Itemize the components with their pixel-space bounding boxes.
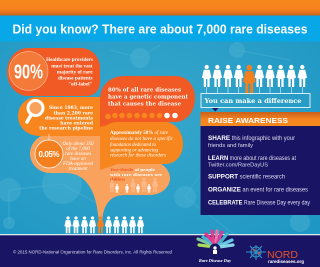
footer xyxy=(0,234,320,267)
text: FDA approved: treatment xyxy=(69,167,88,172)
logo: NORD xyxy=(246,245,304,264)
text: research pipeline: Since 1983, more xyxy=(49,105,93,111)
icon: magnifying glass xyxy=(27,100,43,122)
panel: awareness list: friends and family xyxy=(208,143,253,149)
logo: rare disease day xyxy=(198,231,233,263)
text: foundation: research for these disorders xyxy=(110,154,166,158)
text: two-thirds: children xyxy=(110,176,125,182)
panel: awareness list: LEARN more about rare diseases at xyxy=(208,155,296,162)
panel: red 90 percent bubble xyxy=(7,48,100,96)
text: FDA approved: have an xyxy=(70,157,86,162)
panel: peach left bubble with tail xyxy=(30,134,170,221)
panel: awareness list: CELEBRATE Rare Disease Day every day xyxy=(208,200,310,206)
text: genetic component: that causes the disease xyxy=(108,102,182,108)
text: foundation: Approximately 50% of rare xyxy=(110,131,169,136)
panel: red 80 percent bubble xyxy=(100,76,195,127)
text: foundation: supporting or advancing xyxy=(110,148,158,154)
panel: awareness list: SHARE this infographic with your xyxy=(208,135,295,142)
text: foundation: diseases do not have a specific xyxy=(110,137,174,142)
heading: raise awareness: RAISE AWARENESS xyxy=(208,116,288,125)
text: FDA approved: rare diseases xyxy=(65,152,91,157)
title banner xyxy=(0,16,320,42)
logo: NORD: rarediseases.org xyxy=(268,259,304,264)
text: FDA approved: FDA-approved xyxy=(62,162,94,167)
text: research pipeline: the research pipeline xyxy=(39,126,93,132)
callout: you can make a difference xyxy=(201,87,310,112)
text: two-thirds: with rare diseases are xyxy=(109,172,162,177)
text: two-thirds xyxy=(109,167,162,182)
text: FDA approved: of the 7,000 xyxy=(66,147,90,152)
text: off-label: majority of rare xyxy=(57,70,93,76)
text: genetic component xyxy=(108,88,188,108)
stat: 90 percent: 90% xyxy=(14,62,43,84)
stat: 90 percent xyxy=(9,52,48,90)
text: two-thirds: Two-thirds of people xyxy=(110,167,155,172)
panel: awareness list: SUPPORT scientific research xyxy=(208,174,285,180)
text: genetic component: have a genetic component xyxy=(108,94,188,100)
text: foundation: foundation dedicated to xyxy=(110,143,156,148)
dots: 80 percent xyxy=(105,113,178,119)
stat: 0.05 percent: 0.05% xyxy=(38,150,60,159)
copyright: © 2015 NORD-National Organization for Rare Disorders, Inc. All Rights Reserved xyxy=(13,250,173,254)
text: genetic component: 80% of all rare diseases xyxy=(108,88,181,94)
panel: awareness list: ORGANIZE an event for rare diseases xyxy=(208,186,308,194)
panel: awareness list: Twitter.com/RareDayUS xyxy=(208,162,268,168)
text: off-label: Healthcare providers xyxy=(46,57,93,63)
panel: orange research pipeline bubble xyxy=(18,97,112,136)
people row: bottom xyxy=(64,216,144,233)
text: off-label: must treat the vast xyxy=(51,64,93,70)
callout: you can make a difference: You can make a difference xyxy=(203,98,302,105)
text: off-label: "off-label" xyxy=(68,82,93,88)
text: research pipeline: disease treatments xyxy=(45,116,93,122)
text: research pipeline: have entered xyxy=(60,120,94,126)
panel: orange foundation bubble xyxy=(100,122,183,170)
logo: rare disease day: Rare Disease Day xyxy=(199,258,231,263)
stat: 0.05 percent xyxy=(35,134,63,168)
text: off-label: disease patients xyxy=(58,76,92,82)
text: FDA approved: Only about 350 xyxy=(62,142,94,147)
text: foundation xyxy=(110,131,174,158)
logo: NORD: NORD xyxy=(267,249,298,261)
text: research pipeline: than 2,200 rare xyxy=(54,110,93,116)
panel: raise awareness xyxy=(200,112,320,126)
panel: awareness list xyxy=(200,126,320,215)
top orange band xyxy=(0,0,320,16)
text: research pipeline xyxy=(39,105,94,132)
people row: you can make a difference xyxy=(202,65,307,94)
text: off-label xyxy=(46,57,93,88)
text: FDA approved xyxy=(62,142,94,172)
icon: family figures xyxy=(109,178,158,193)
